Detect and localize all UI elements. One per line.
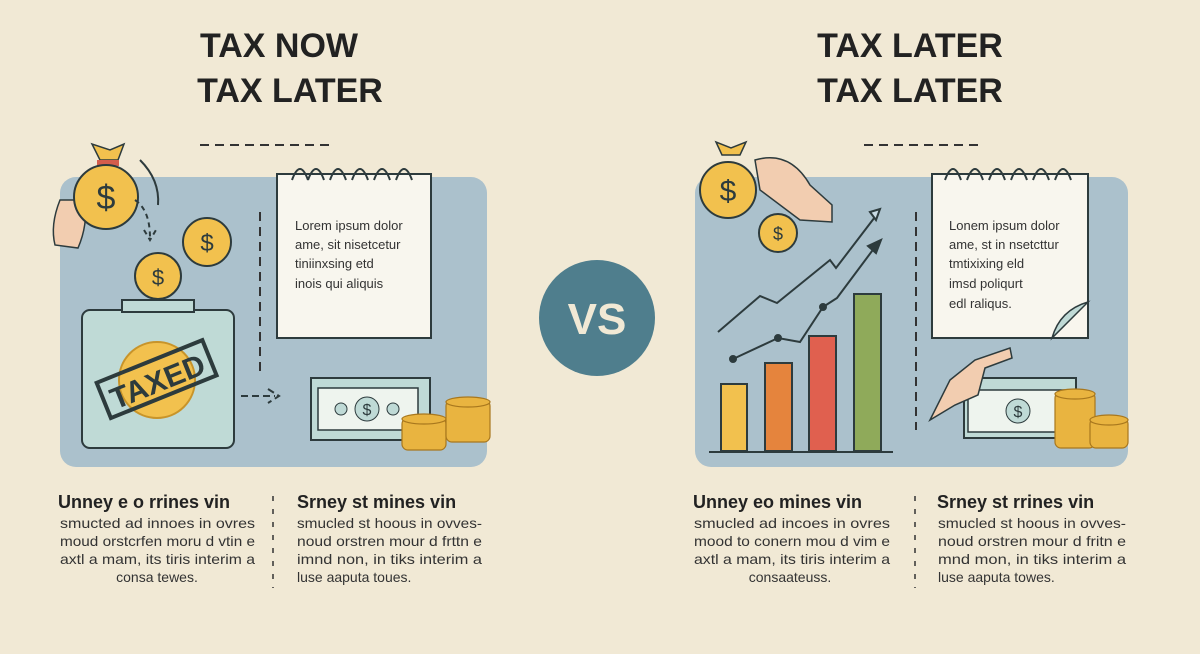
notepad: left: ame, sit nisetcetur [295, 237, 401, 252]
title: left: TAX LATER [197, 72, 383, 110]
icon: jar with taxed coin [82, 300, 234, 448]
arrow: dashed to cash [241, 389, 279, 403]
text block: left column 2: Srney st mines vin [297, 492, 456, 512]
icon: money bag and hand: $ [720, 175, 737, 208]
panel: tax later [695, 142, 1128, 467]
text block: right column 1: mood to conern mou d vim e [694, 533, 890, 549]
title: left [197, 27, 383, 110]
notepad: right: ame, st in nsetcttur [949, 237, 1059, 252]
text block: right column 2 [937, 492, 1126, 585]
text block: right column 1: axtl a mam, its tiris interim a [694, 551, 890, 567]
icon: money bag and hand: $ [773, 224, 783, 244]
icon: cash and coin stacks: $ [363, 402, 372, 419]
icon: money bag with hand [53, 144, 158, 248]
divider left [272, 496, 274, 588]
notepad: left: inois qui aliquis [295, 276, 384, 291]
text block: left column 2: smucled st hoous in ovves- [297, 515, 482, 531]
text block: left column 2: noud orstren mour d frttn e [297, 533, 482, 549]
text block: right column 2: smucled st hoous in ovves- [938, 515, 1126, 531]
icon: money bag with hand: $ [97, 179, 116, 217]
panel: tax now [53, 144, 490, 467]
text block: left column 1: Unney e o rrines vin [58, 492, 230, 512]
text block: left column 2: luse aaputa toues. [297, 569, 411, 585]
icon: cash and coin stacks [311, 378, 490, 450]
notepad: left: Lorem ipsum dolor [295, 218, 403, 233]
icon: coins falling: $ [200, 230, 214, 257]
text block: right column 2: mnd mon, in tiks interim a [938, 551, 1126, 567]
notepad: left: tiniinxsing etd [295, 256, 374, 271]
text block: left column 1: moud orstcrfen moru d vtin e [60, 533, 255, 549]
text block: right column 2: luse aaputa towes. [938, 569, 1055, 585]
text block: right column 1: consaateuss. [749, 569, 831, 585]
text block: right column 1: smucled ad incoes in ovres [694, 515, 890, 531]
arrows: growth lines [718, 209, 881, 362]
divider right [914, 496, 916, 588]
text block: right column 2: Srney st rrines vin [937, 492, 1094, 512]
title: right [817, 27, 1003, 110]
title: right: TAX LATER [817, 72, 1003, 110]
text block: left column 1: axtl a mam, its tiris interim a [60, 551, 255, 567]
text block: right column 1 [693, 492, 890, 585]
notepad: right: edl raliqus. [949, 296, 1012, 311]
icon: pointing hand, cash and coins [930, 348, 1128, 448]
text block: left column 2 [297, 492, 482, 585]
icon: coins falling [135, 218, 231, 299]
text block: left column 1: consa tewes. [116, 569, 198, 585]
notepad: right [932, 169, 1088, 338]
text block: left column 1: smucted ad innoes in ovres [60, 515, 255, 531]
icon: coins falling: $ [152, 265, 164, 290]
title: right: TAX LATER [817, 27, 1003, 65]
icon: jar with taxed coin: TAXED [106, 348, 210, 416]
text block: left column 2: imnd non, in tiks interim a [297, 551, 482, 567]
title: left: TAX NOW [200, 27, 359, 65]
icon: pointing hand, cash and coins: $ [1014, 404, 1023, 421]
vs badge: VS [568, 295, 626, 344]
text block: left column 1 [58, 492, 255, 585]
notepad: right: Lonem ipsum dolor [949, 218, 1060, 233]
vs badge [539, 260, 655, 376]
notepad: right: tmtixixing eld [949, 256, 1024, 271]
bar chart [709, 294, 893, 452]
text block: right column 1: Unney eo mines vin [693, 492, 862, 512]
text block: right column 2: noud orstren mour d fritn e [938, 533, 1126, 549]
icon: money bag and hand [700, 142, 832, 252]
notepad: right: imsd poliqurt [949, 276, 1023, 291]
notepad: left [277, 169, 431, 338]
